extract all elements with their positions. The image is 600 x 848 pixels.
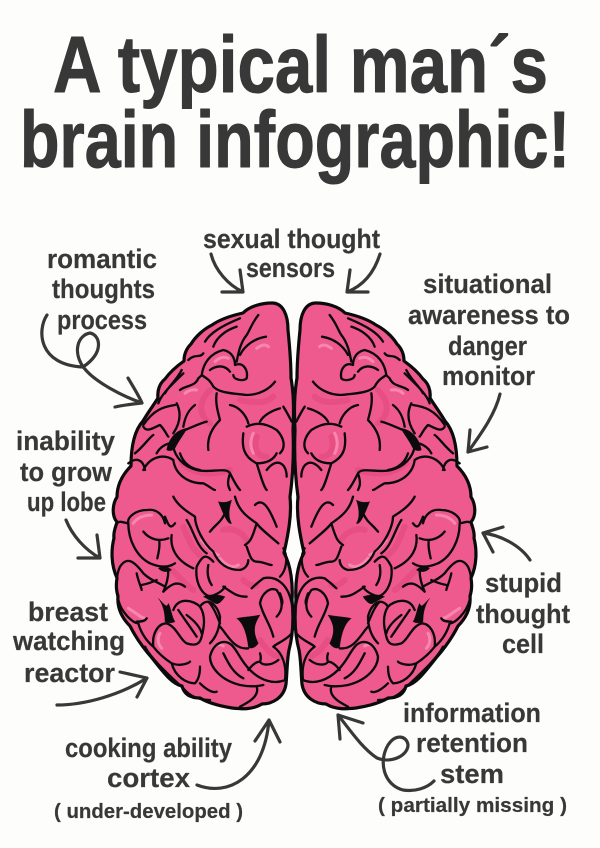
label: inability to grow up lobe: to grow xyxy=(20,457,113,487)
label: stupid thought cell: cell xyxy=(502,629,544,659)
label: stupid thought cell: stupid xyxy=(485,568,562,598)
arrow: information retention xyxy=(338,715,434,791)
label: information retention stem xyxy=(378,698,567,817)
label: breast watching reactor: breast xyxy=(28,597,108,627)
arrow: inability xyxy=(66,520,100,558)
label: inability to grow up lobe: inability xyxy=(16,426,115,456)
arrow: breast watching xyxy=(57,672,147,705)
brain illustration xyxy=(112,303,476,709)
label: breast watching reactor: reactor xyxy=(24,658,115,688)
label: sexual thought sensors: sensors xyxy=(246,253,335,283)
label: romantic thoughts process: process xyxy=(57,305,147,335)
label: situational awareness to danger monitor: awareness to xyxy=(408,300,570,330)
label: stupid thought cell xyxy=(476,568,570,659)
label: sexual thought sensors: sexual thought xyxy=(203,224,380,254)
label: information retention stem: ( partially missing ) xyxy=(378,795,567,817)
label: information retention stem: information xyxy=(403,698,541,728)
arrow: sexual thought left xyxy=(211,254,243,292)
label: situational awareness to danger monitor xyxy=(408,269,570,391)
label: information retention stem: retention xyxy=(416,728,528,758)
label: situational awareness to danger monitor: monitor xyxy=(442,361,535,391)
label: stupid thought cell: thought xyxy=(476,599,570,629)
right hemisphere xyxy=(294,303,476,709)
title xyxy=(20,20,570,184)
label: romantic thoughts process: romantic xyxy=(47,244,157,274)
label: sexual thought sensors xyxy=(203,224,380,283)
label: cooking ability cortex: cortex xyxy=(107,763,190,793)
arrow: danger monitor xyxy=(468,394,500,452)
label: breast watching reactor: watching xyxy=(12,626,125,656)
label: romantic thoughts process xyxy=(47,244,157,335)
label: inability to grow up lobe xyxy=(16,426,115,517)
left hemisphere xyxy=(112,303,294,709)
arrow: romantic thoughts xyxy=(42,315,142,407)
label: breast watching reactor xyxy=(12,597,125,688)
label: information retention stem: stem xyxy=(440,759,504,789)
label: situational awareness to danger monitor: danger xyxy=(448,331,527,361)
label: cooking ability cortex: cooking ability xyxy=(65,733,232,763)
arrow: stupid thought xyxy=(483,527,530,560)
label: cooking ability cortex: ( under-developed ) xyxy=(54,801,243,823)
arrow: sexual thought right xyxy=(347,254,380,292)
label: situational awareness to danger monitor: situational xyxy=(423,269,552,299)
label: cooking ability cortex xyxy=(54,733,243,823)
label: inability to grow up lobe: up lobe xyxy=(27,487,106,517)
label: romantic thoughts process: thoughts xyxy=(52,274,155,304)
arrow: cooking ability xyxy=(197,720,280,788)
